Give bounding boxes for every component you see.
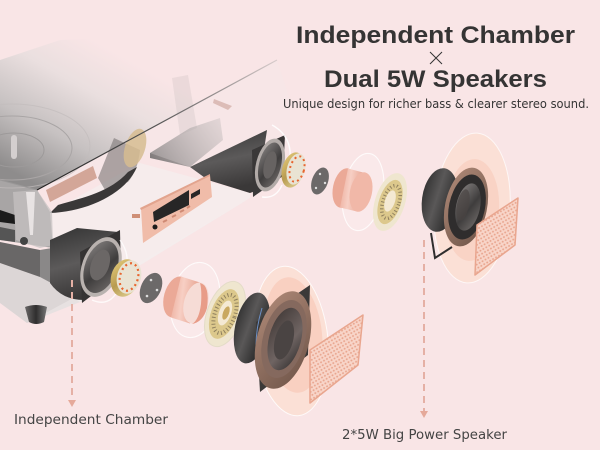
usb port [191,189,200,199]
exploded parts, front row [107,256,254,352]
pale lower panel of base [0,263,85,323]
grey body behind lid corner [0,180,53,248]
mesh grille, rear [475,198,518,275]
magnet [228,289,276,367]
frame corner [431,233,452,258]
sound wave rings [164,258,226,342]
sound wave rings [337,150,389,234]
pin [132,214,140,218]
spindle [11,135,17,159]
grey mounting disc [135,269,167,307]
display [153,190,189,222]
cross sign [430,52,442,64]
title [296,22,575,93]
exploded parts, rear row [278,150,414,235]
buttons [163,206,190,222]
mesh grille, front [310,315,363,403]
sound halo [246,263,336,419]
label: independent chamber: Independent Chamber [14,413,169,428]
big speaker, front [228,263,336,419]
gold driver cap [278,150,308,190]
dark platter underside [50,167,137,213]
tonearm red detail [213,99,232,110]
ghost gold cone seen through lid [119,126,151,170]
arrow: independent chamber [68,280,76,407]
surround [245,285,321,395]
gold driver cap [107,256,143,300]
title: Dual 5W Speakers [324,66,547,93]
label: big power speaker: 2*5W Big Power Speaker [342,428,508,443]
subtitle: Unique design for richer bass & clearer stereo sound. [283,97,589,111]
lid corner post [13,190,53,248]
copper ring [159,274,193,320]
title: Independent Chamber [296,22,575,49]
lid front edge [0,180,37,190]
ghost speaker through lid [98,138,140,190]
copper ring [329,166,359,210]
arrow: big power speaker [420,240,428,418]
black slot [0,210,15,224]
control board with display [132,174,212,243]
tonearm ghost [172,75,197,135]
rear chamber seen through case [150,118,223,167]
audio jack [152,224,158,230]
base front face [0,242,40,277]
surround [437,164,495,250]
sound halo [429,131,515,285]
big speaker, rear [418,131,515,285]
turntable body [0,35,290,324]
lid rear glass [37,60,290,190]
blue trim [256,308,262,346]
platter rings [0,104,90,188]
ghost mesh seen through lid [46,166,97,202]
foot [25,305,47,324]
square frame [256,285,310,392]
gold cone [196,276,254,352]
magnet [418,166,462,234]
translucent inner shelf [50,163,250,302]
gold cone [366,169,414,235]
grey mounting disc [308,165,332,197]
hinge knob [20,237,28,245]
transparent lid top [0,35,277,190]
rear speaker on turntable [190,125,290,197]
front speaker on turntable [50,228,129,303]
